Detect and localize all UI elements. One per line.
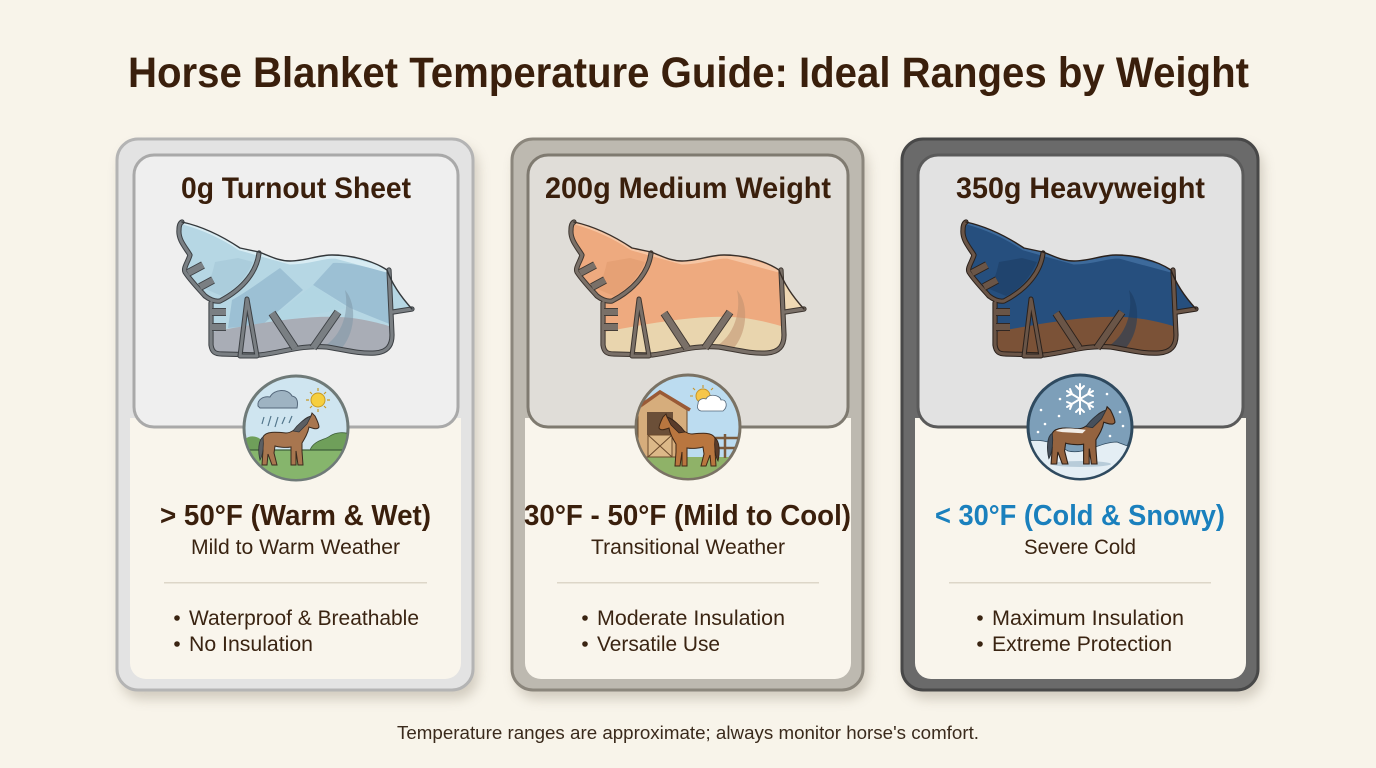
feature list: Versatile Use [597,633,720,656]
feature list: No Insulation [189,633,313,656]
subtitle: Severe Cold [1024,536,1136,559]
icon: horse in snow [1028,375,1132,481]
heading: 200g medium weight: 200g Medium Weight [545,172,831,205]
panel: 350g heavyweight [902,139,1263,699]
icon: navy blanket [963,222,1196,356]
icon: horse by barn [636,375,740,481]
panel: 200g medium weight [512,139,868,699]
feature list: Waterproof & Breathable [189,607,419,630]
feature list: Extreme Protection [992,633,1172,656]
title: Horse Blanket Temperature Guide: Ideal Ranges by Weight [128,49,1249,97]
temperature: mild to cool: 30°F - 50°F (Mild to Cool) [524,500,851,532]
icon: light blue blanket [179,222,412,356]
panel: 0g turnout sheet [117,139,478,699]
subtitle: Transitional Weather [591,536,785,559]
feature list [977,607,1184,656]
feature list [174,607,419,656]
footnote: Temperature ranges are approximate; always monitor horse's comfort. [397,723,979,743]
feature list: Maximum Insulation [992,607,1184,630]
heading: 350g heavyweight: 350g Heavyweight [956,172,1205,205]
icon: orange blanket [571,222,804,356]
temperature: warm and wet: > 50°F (Warm & Wet) [160,500,431,532]
feature list [582,607,785,656]
heading: 0g turnout sheet: 0g Turnout Sheet [181,172,411,205]
feature list: Moderate Insulation [597,607,785,630]
icon: horse in rain and sun [244,376,350,482]
subtitle: Mild to Warm Weather [191,536,400,559]
temperature: cold and snowy: < 30°F (Cold & Snowy) [935,500,1225,532]
